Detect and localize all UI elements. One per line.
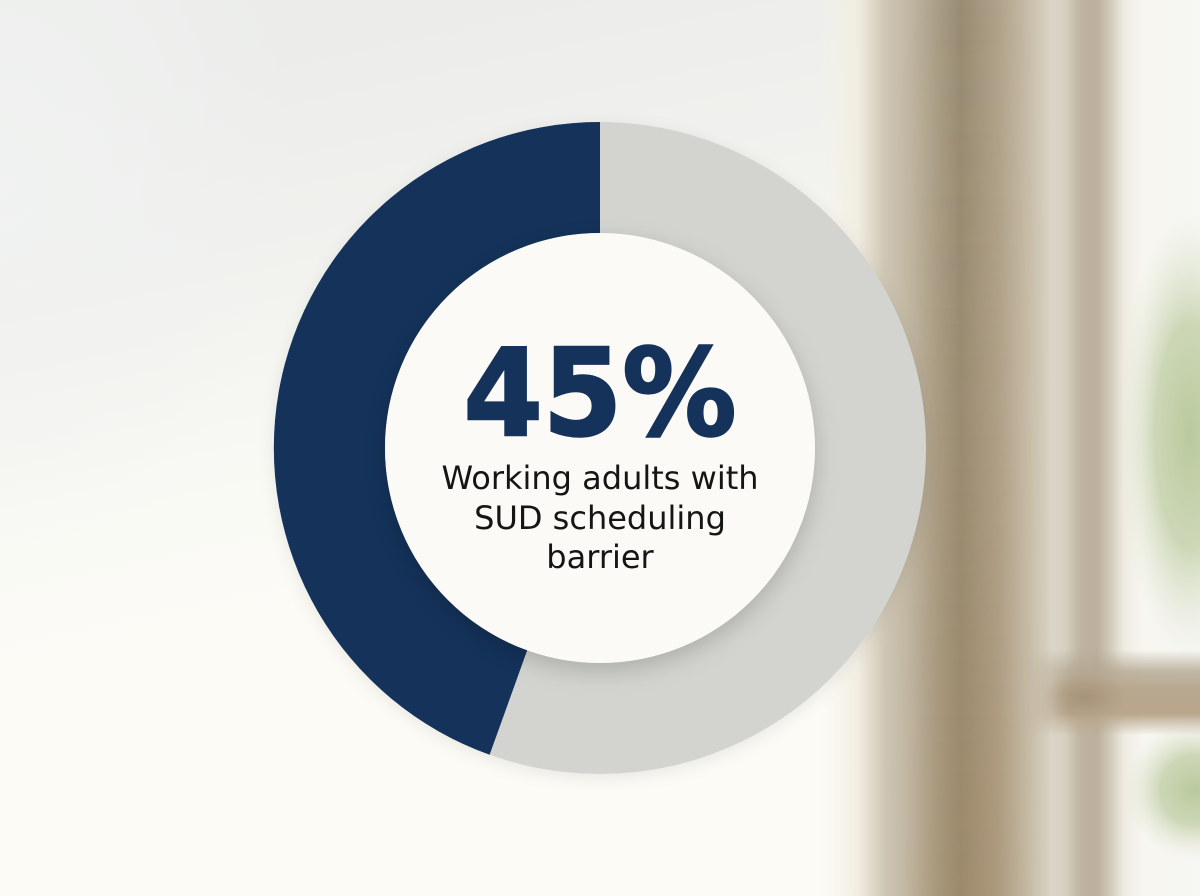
caption bbox=[441, 459, 759, 576]
donut remainder segment bbox=[274, 122, 926, 774]
caption: SUD scheduling bbox=[474, 498, 726, 536]
caption: barrier bbox=[546, 538, 654, 576]
caption: Working adults with bbox=[441, 459, 759, 497]
donut centre disc bbox=[385, 233, 815, 663]
donut 45% segment bbox=[274, 122, 600, 755]
headline number: 45% bbox=[464, 325, 736, 464]
